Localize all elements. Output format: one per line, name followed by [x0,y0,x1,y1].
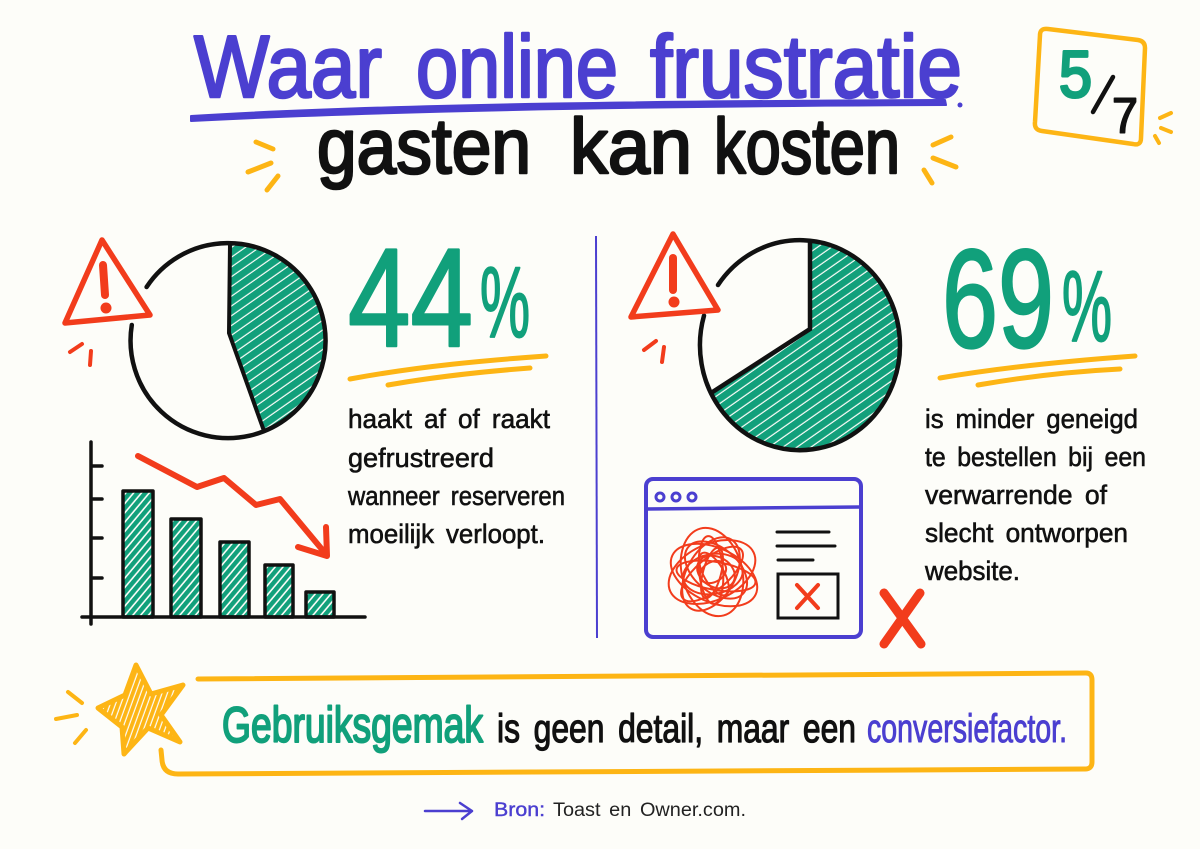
scribble [658,521,767,623]
warning icon [65,240,150,365]
yellow underline [350,356,546,385]
statistic 69%: % [1062,251,1112,363]
callout text: is geen detail, maar een [497,707,856,751]
description 44%: moeilijk verloopt. [348,519,545,549]
badge sparks [1155,113,1171,143]
big red cross [884,593,921,644]
text lines [777,532,835,560]
title line 2: kosten [714,102,900,190]
title [191,17,962,190]
description 44%: gefrustreerd [348,443,494,473]
callout [56,665,1092,774]
warning icon [631,234,718,362]
title line 2: gasten [317,102,531,190]
title underline [191,100,962,121]
badge slash [1093,77,1113,112]
source text: Bron: [494,800,545,821]
title line 1: frustratie [650,17,962,116]
description 69% [924,404,1146,586]
callout text [222,697,1067,753]
error box [778,574,838,618]
statistic 44%: % [480,247,530,359]
description 69%: verwarrende of [925,480,1107,510]
callout text: Gebruiksgemak [222,697,484,753]
panel: 44 percent [65,219,565,624]
declining bar chart [82,442,365,624]
title line 1: online [416,17,618,116]
star icon [98,665,183,754]
badge seven: 7 [1112,88,1138,144]
callout text: conversiefactor. [867,707,1067,751]
description 69%: slecht ontworpen [925,518,1128,548]
description 44%: haakt af of raakt [348,404,550,434]
description 69%: website. [924,556,1020,586]
title line 2 [317,102,900,190]
description 69%: te bestellen bij een [925,442,1146,472]
callout frame [161,673,1092,774]
title line 1 [194,17,962,116]
page badge 5/7 [1035,29,1145,144]
source line [425,800,746,821]
red down arrow [138,456,327,556]
star sparks [56,692,86,743]
yellow underline [940,356,1135,385]
pie chart 69% [700,240,900,450]
pie chart 44% [131,243,326,438]
badge number: 5 [1059,37,1092,111]
description 44%: wanneer reserveren [347,481,565,511]
confusing website window [646,479,861,637]
description 44% [347,404,565,549]
title sparks [248,137,956,190]
title line 2: kan [570,102,692,190]
arrow [425,803,472,819]
statistic 69%: 69 [942,220,1054,377]
description 69%: is minder geneigd [925,404,1138,434]
panel: 69 percent [631,220,1146,644]
badge frame [1035,29,1145,144]
statistic 44%: 44 [348,219,473,376]
source text: Toast en Owner.com. [553,800,746,821]
title line 1: Waar [194,17,382,116]
